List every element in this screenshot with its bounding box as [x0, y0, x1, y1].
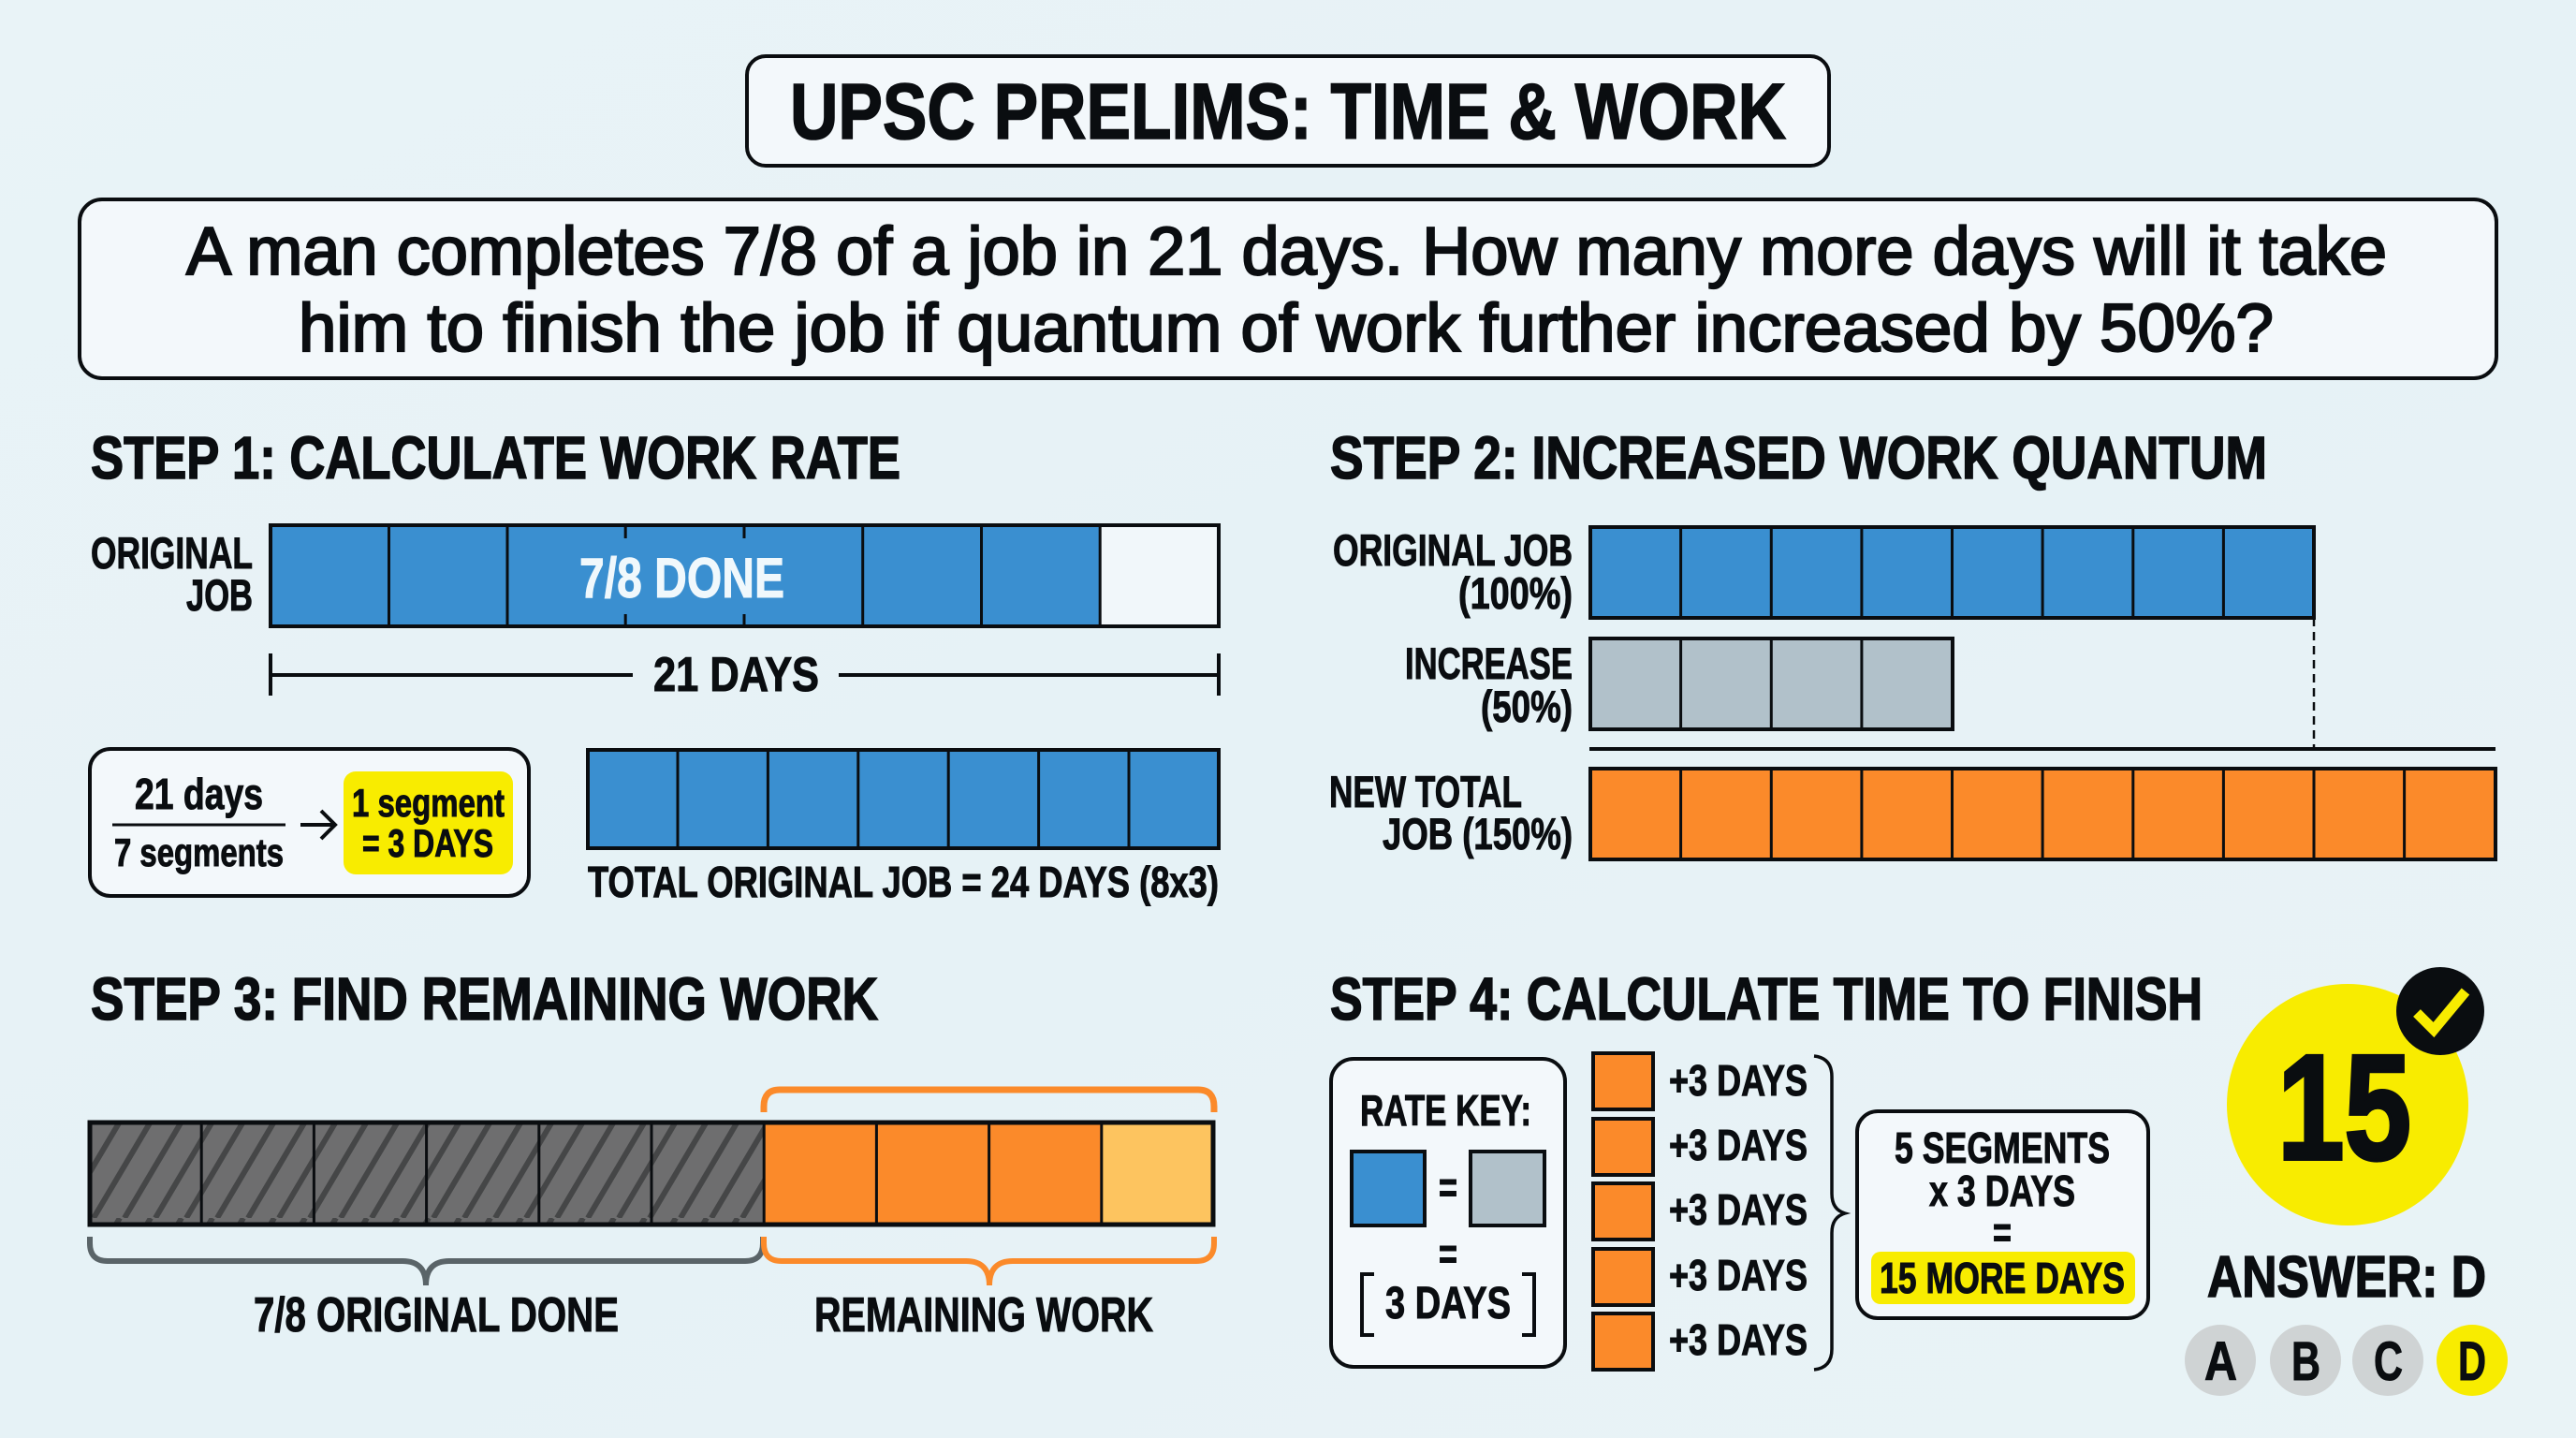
label: increase 50%: (50%): [1481, 682, 1573, 731]
label: original job: [91, 528, 253, 620]
label: original job 100%: ORIGINAL JOB: [1333, 525, 1573, 575]
answer options: [2185, 1325, 2508, 1396]
icon: arrow: [300, 811, 335, 839]
question panel: [80, 199, 2496, 378]
callout: rate per segment: [90, 749, 529, 896]
dimension: 21 days: 21 DAYS: [653, 648, 819, 702]
callout: rate per segment: 7 segments: [114, 830, 284, 874]
bar: seven blue segments: [588, 750, 1219, 848]
label: original job 100%: (100%): [1458, 568, 1573, 618]
panel: rate key: [1331, 1059, 1565, 1367]
answer options: D: [2458, 1331, 2486, 1392]
label: new total job: NEW TOTAL: [1329, 767, 1522, 816]
list: five orange segments: +3 DAYS: [1669, 1185, 1808, 1234]
panel: rate key: =: [1439, 1163, 1457, 1211]
answer options: C: [2374, 1331, 2403, 1392]
bar: original job: [1590, 527, 2314, 618]
answer options: A: [2204, 1331, 2237, 1392]
panel: step 1: [90, 424, 1219, 906]
label: increase 50%: INCREASE: [1405, 638, 1573, 688]
list: five orange segments: +3 DAYS: [1669, 1056, 1808, 1105]
label: new total job: JOB (150%): [1383, 809, 1573, 858]
caption: total original job: TOTAL ORIGINAL JOB = 24 DAYS (8x3): [588, 858, 1219, 906]
label: original job: JOB: [186, 570, 253, 620]
highlight: 1 segment = 3 days: = 3 DAYS: [362, 821, 493, 865]
label: increase 50%: [1405, 638, 1573, 731]
heading: step 2: STEP 2: INCREASED WORK QUANTUM: [1330, 424, 2267, 492]
list: five orange segments: [1593, 1053, 1808, 1370]
heading: step 1: STEP 1: CALCULATE WORK RATE: [91, 424, 900, 492]
bar: 7/8 done: 7/8 DONE: [579, 547, 784, 609]
question panel: him to finish the job if quantum of work further increased by 50%?: [299, 291, 2274, 366]
title: UPSC PRELIMS: TIME & WORK: [790, 67, 1786, 155]
panel: result: [1857, 1111, 2148, 1318]
list: five orange segments: +3 DAYS: [1669, 1315, 1808, 1364]
panel: rate key: RATE KEY:: [1360, 1086, 1531, 1135]
answer badge: 15: [2227, 967, 2484, 1225]
panel: rate key: 3 DAYS: [1385, 1279, 1511, 1328]
label: 7/8 original done: 7/8 ORIGINAL DONE: [254, 1288, 619, 1343]
label: original job: ORIGINAL: [91, 528, 253, 578]
brace: done: [90, 1237, 763, 1285]
bar: increase: [1590, 638, 1953, 729]
answer options: B: [2291, 1331, 2320, 1392]
label: original job 100%: [1333, 525, 1573, 618]
bar: ten segments: [89, 1122, 1214, 1225]
callout: rate per segment: 21 days: [135, 770, 263, 818]
guide: dashed line: [2313, 618, 2315, 749]
highlight: 1 segment = 3 days: 1 segment: [352, 781, 505, 825]
panel: step 3: [89, 965, 1214, 1343]
panel: result: x 3 DAYS: [1929, 1167, 2075, 1215]
brace: sum of segments: [1814, 1056, 1845, 1370]
bracket: top remaining: [764, 1090, 1214, 1112]
label: remaining work: REMAINING WORK: [814, 1288, 1153, 1343]
question panel: A man completes 7/8 of a job in 21 days. How many more days will it take: [186, 214, 2387, 289]
panel: rate key: =: [1439, 1229, 1457, 1278]
answer label: ANSWER: D: [2207, 1245, 2486, 1310]
heading: step 3: STEP 3: FIND REMAINING WORK: [91, 965, 878, 1033]
dimension: 21 days: [271, 648, 1219, 702]
panel: result: =: [1993, 1208, 2012, 1256]
brace: remaining: [764, 1237, 1214, 1285]
answer badge: 15: 15: [2277, 1023, 2411, 1191]
icon: check mark: [2396, 967, 2484, 1055]
list: five orange segments: +3 DAYS: [1669, 1121, 1808, 1169]
highlight: 15 more days: 15 MORE DAYS: [1880, 1254, 2125, 1302]
panel: step 2: [1329, 424, 2496, 859]
bar: 7/8 done: [271, 525, 1219, 627]
bar: new total: [1590, 769, 2496, 859]
panel: step 4: [1330, 965, 2508, 1396]
panel: result: 5 SEGMENTS: [1895, 1123, 2110, 1172]
rule: sum line: [1589, 747, 2496, 751]
list: five orange segments: +3 DAYS: [1669, 1251, 1808, 1299]
label: new total job: [1329, 767, 1573, 858]
highlight: 1 segment = 3 days: [344, 771, 513, 874]
heading: step 4: STEP 4: CALCULATE TIME TO FINISH: [1330, 965, 2203, 1033]
